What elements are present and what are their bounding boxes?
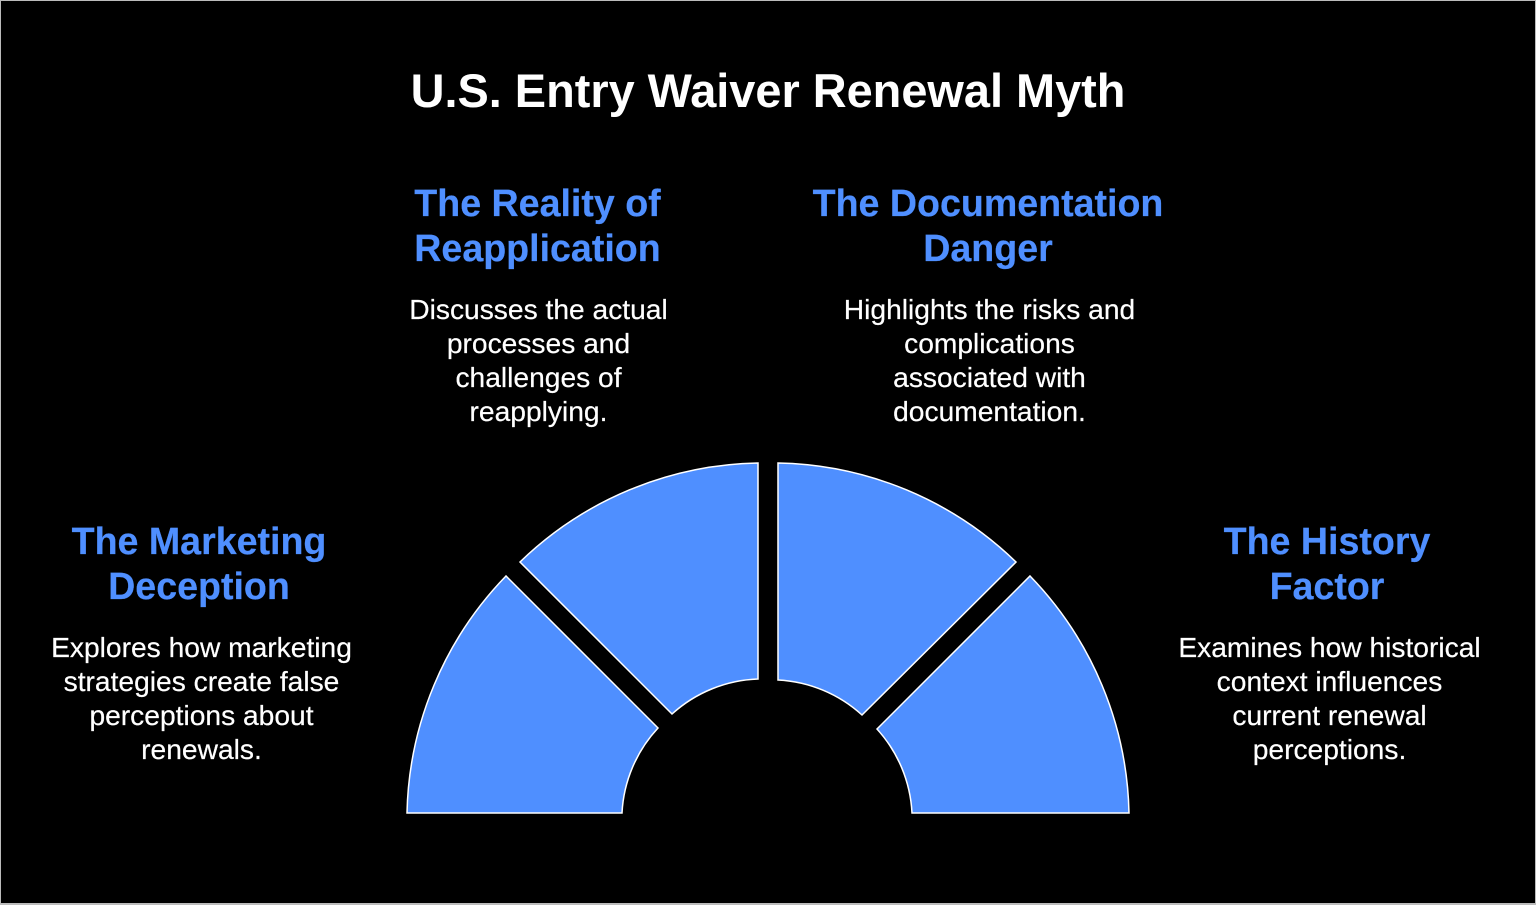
text: reapplication description: reapplying.	[470, 395, 607, 427]
segment: reapplication	[520, 463, 758, 714]
heading: The Reality of Reapplication: Reapplication	[414, 227, 661, 269]
text: marketing description: strategies create false	[64, 665, 339, 697]
heading: The Documentation Danger: Danger	[923, 227, 1053, 269]
heading: The Reality of Reapplication: The Reality of	[414, 182, 661, 224]
text: reapplication description	[409, 293, 668, 428]
text: documentation description: Highlights the risks and	[844, 293, 1135, 325]
heading: The History Factor: The History	[1224, 520, 1430, 562]
text: marketing description	[51, 631, 352, 765]
segment: documentation	[778, 463, 1016, 715]
heading: The Marketing Deception: Deception	[108, 565, 290, 607]
text: documentation description	[844, 293, 1135, 427]
heading: The Reality of Reapplication	[414, 182, 661, 270]
heading: The Marketing Deception	[72, 520, 326, 608]
text: history description: context influences	[1217, 665, 1442, 697]
heading: The History Factor	[1224, 520, 1430, 607]
text: marketing description: Explores how marketing	[51, 631, 352, 663]
segment: marketing	[407, 576, 658, 813]
heading: The History Factor: Factor	[1270, 565, 1384, 607]
text: reapplication description: Discusses the actual	[409, 293, 668, 325]
text: history description: perceptions.	[1253, 733, 1406, 765]
heading: The Documentation Danger	[812, 182, 1163, 270]
text: history description	[1178, 631, 1481, 766]
text: history description: current renewal	[1232, 699, 1427, 731]
heading: The Documentation Danger: The Documentation	[813, 182, 1163, 224]
segment: history	[877, 576, 1129, 813]
title: U.S. Entry Waiver Renewal Myth	[411, 65, 1125, 117]
text: marketing description: renewals.	[141, 733, 262, 765]
heading: The Marketing Deception: The Marketing	[72, 520, 326, 562]
text: documentation description: complications	[904, 327, 1075, 359]
text: history description: Examines how historical	[1178, 631, 1481, 663]
text: reapplication description: processes and	[447, 327, 630, 359]
text: documentation description: associated with	[893, 361, 1086, 393]
text: marketing description: perceptions about	[89, 699, 314, 731]
text: reapplication description: challenges of	[455, 361, 622, 393]
text: documentation description: documentation.	[893, 395, 1086, 427]
